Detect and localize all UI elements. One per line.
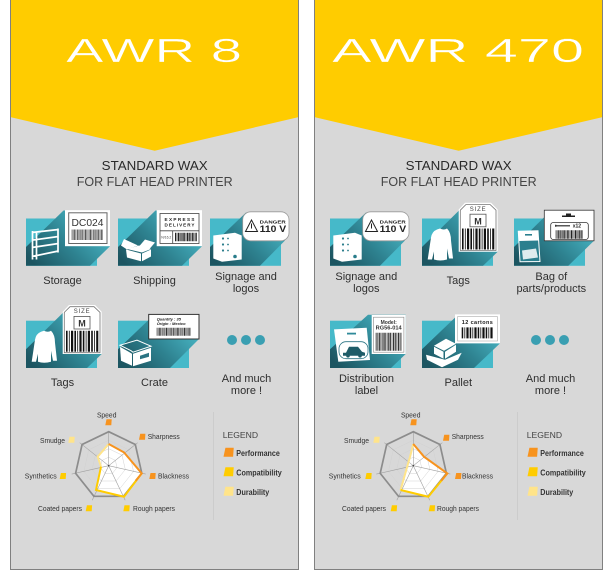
icon: tags: SIZE — [74, 309, 90, 315]
icon: storage — [26, 210, 110, 266]
label: and much more: more ! — [231, 385, 262, 397]
label: pallet: Pallet — [445, 377, 472, 389]
icon: shipping — [118, 210, 202, 266]
subheading: flat head printer: FOR FLAT HEAD PRINTER — [77, 174, 233, 189]
icon: storage: DC024 — [72, 218, 104, 229]
yellow header banner — [315, 0, 602, 151]
legend — [527, 430, 586, 497]
label: and much more: And much — [222, 373, 271, 385]
radar chart: Coated papers — [38, 504, 82, 513]
icon: distribution label: Model: — [381, 320, 397, 326]
radar chart: Sharpness — [452, 432, 484, 441]
yellow header banner — [11, 0, 298, 151]
icon: bag of parts — [514, 210, 594, 266]
panel: AWR 470 — [314, 0, 602, 570]
icon: distribution label: RG56-014 — [376, 326, 402, 332]
legend: LEGEND — [527, 430, 562, 440]
icon: distribution label — [330, 315, 406, 368]
legend: LEGEND — [223, 430, 258, 440]
label: bag of parts/products: Bag of — [535, 271, 567, 283]
radar chart: Blackness — [462, 472, 493, 480]
radar chart: Speed — [401, 410, 420, 420]
icon: pallet — [422, 314, 500, 368]
label: signage and logos: logos — [353, 283, 380, 295]
title: AWR 470: AWR 470 — [332, 33, 584, 70]
icon: shipping: DELIVERY — [164, 223, 194, 228]
icon: signage — [330, 212, 409, 266]
icon: tags: M — [474, 216, 482, 226]
icon: crate: Quantity : 35 — [157, 317, 182, 322]
radar chart: Blackness — [158, 472, 189, 480]
icon: signage — [210, 212, 289, 266]
title: AWR 8: AWR 8 — [66, 33, 242, 70]
legend: Performance — [236, 449, 280, 458]
legend: Durability — [540, 488, 574, 497]
label: crate: Crate — [141, 377, 168, 389]
icon: crate — [118, 314, 199, 368]
heading: standard wax: STANDARD WAX — [406, 158, 512, 173]
legend: Compatibility — [540, 468, 586, 478]
label: distribution label: label — [355, 385, 378, 397]
icon: more dots — [531, 335, 569, 345]
icon: tags: SIZE — [470, 207, 486, 213]
radar chart: Smudge — [344, 436, 369, 445]
icon: signage: DANGER — [260, 220, 287, 224]
radar chart: Synthetics — [25, 472, 57, 480]
icon: tags: M — [78, 319, 86, 329]
radar chart: Synthetics — [329, 472, 361, 480]
radar chart: Smudge — [40, 436, 65, 445]
label: and much more: more ! — [535, 385, 566, 397]
radar chart: Coated papers — [342, 504, 386, 513]
icon: signage: DANGER — [380, 220, 407, 224]
label: tags: Tags — [447, 275, 470, 287]
icon: more dots — [227, 335, 265, 345]
legend — [223, 430, 282, 497]
icon: bag of parts: x12 — [573, 224, 581, 230]
subheading: flat head printer: FOR FLAT HEAD PRINTER — [381, 174, 537, 189]
legend: Compatibility — [236, 468, 282, 478]
legend: Durability — [236, 488, 270, 497]
icon: signage: 110 V — [380, 224, 406, 234]
icon: signage: 110 V — [260, 224, 286, 234]
radar chart: Rough papers — [437, 504, 479, 513]
icon: crate: Origin : Mexico — [157, 321, 186, 326]
label: signage and logos: Signage and — [335, 271, 397, 283]
label: storage: Storage — [43, 275, 82, 287]
icon: shipping: EXPRESS — [164, 217, 194, 222]
radar chart — [329, 410, 493, 513]
icon: tags — [422, 203, 498, 266]
label: and much more: And much — [526, 373, 575, 385]
radar chart — [25, 410, 189, 513]
icon: shipping: N/16.2 — [161, 236, 171, 240]
panel: AWR 8 — [10, 0, 298, 570]
heading: standard wax: STANDARD WAX — [102, 158, 208, 173]
label: tags: Tags — [51, 377, 75, 389]
radar chart: Speed — [97, 410, 116, 420]
label: distribution label: Distribution — [339, 373, 394, 385]
label: signage and logos: Signage and — [215, 271, 277, 283]
radar chart: Rough papers — [133, 504, 175, 513]
legend: Performance — [540, 449, 584, 458]
label: signage and logos: logos — [233, 283, 260, 295]
label: shipping: Shipping — [133, 275, 176, 287]
radar chart: Sharpness — [148, 432, 180, 441]
icon: tags — [26, 305, 102, 368]
icon: pallet: 12 cartons — [462, 320, 493, 326]
label: bag of parts/products: parts/products — [516, 283, 587, 295]
